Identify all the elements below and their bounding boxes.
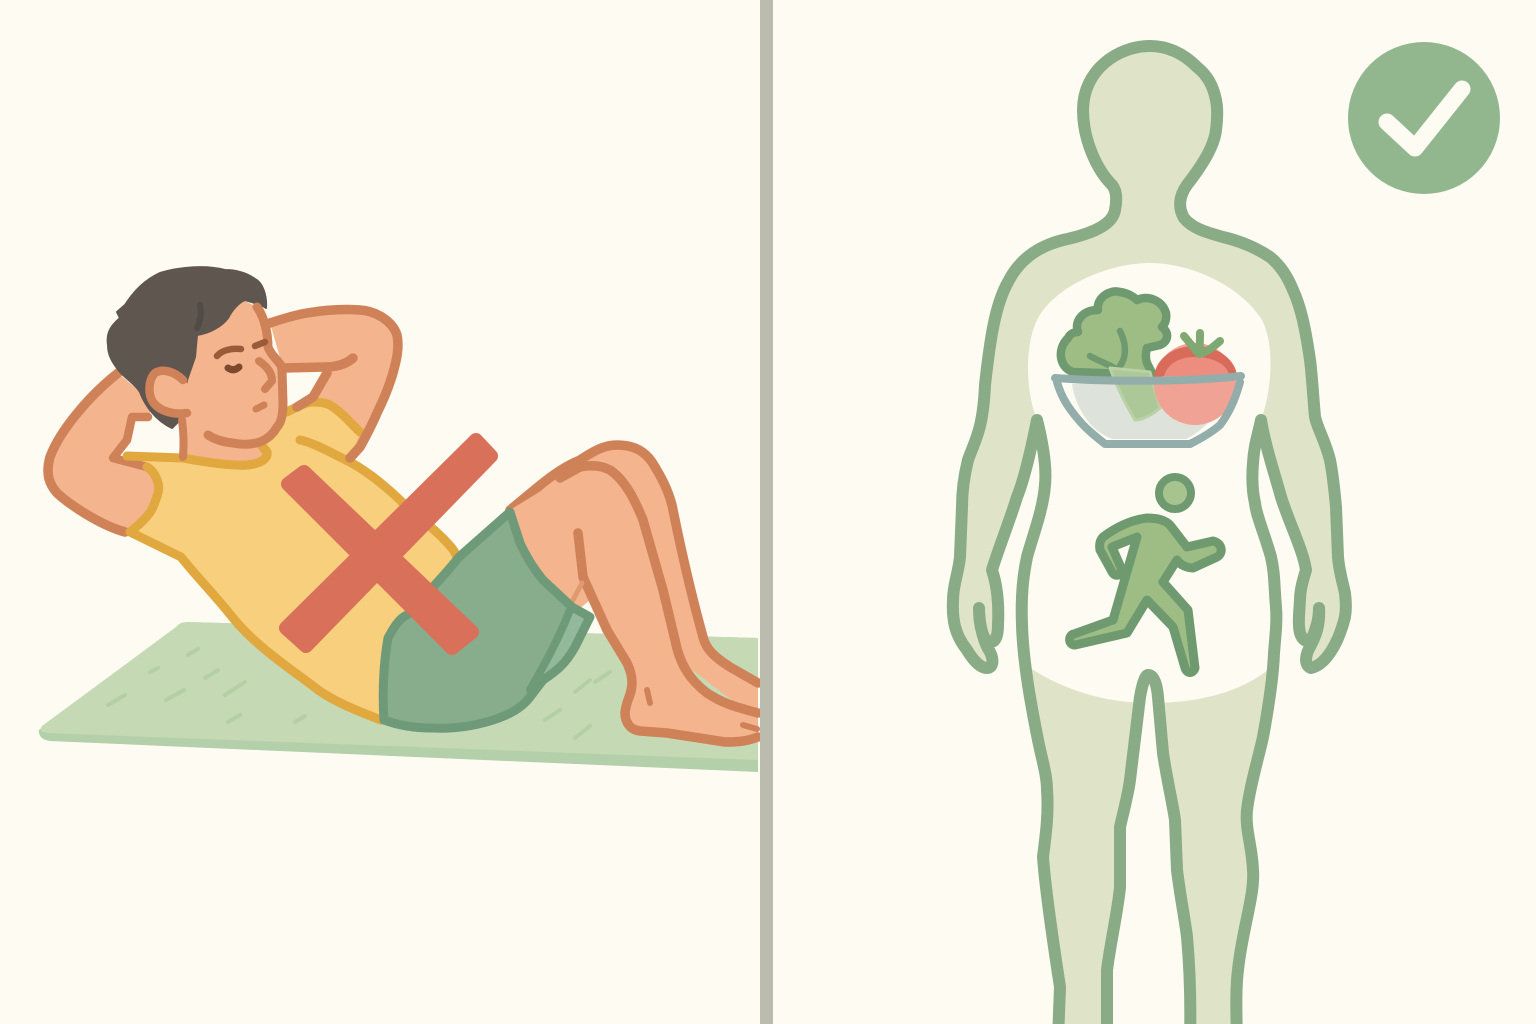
near leg and foot — [510, 466, 758, 742]
broccoli inner lines — [1090, 331, 1125, 374]
face outline — [208, 307, 283, 444]
bowl outline and rim — [1057, 382, 1240, 444]
neck line — [182, 420, 184, 457]
left arm raised behind head — [48, 373, 159, 532]
cream belly highlight — [1022, 263, 1276, 703]
panel divider — [760, 0, 773, 1024]
runner body — [1070, 518, 1221, 672]
icon: green check mark badge — [1348, 42, 1500, 194]
tomato — [1154, 333, 1237, 425]
icon: red X cross mark — [286, 440, 491, 648]
hair — [108, 267, 266, 428]
shirt seams — [127, 402, 459, 720]
eyebrows — [217, 342, 265, 356]
bowl glass interior — [1072, 380, 1235, 439]
right arm behind head — [270, 310, 398, 458]
collar line — [183, 446, 267, 465]
head and face — [108, 267, 283, 465]
shirt — [127, 402, 459, 720]
icon: salad bowl with broccoli and tomato — [1055, 291, 1241, 444]
nose — [259, 361, 272, 389]
mouth — [256, 405, 264, 409]
body silhouette — [953, 46, 1346, 1024]
ear — [149, 371, 197, 414]
closed eye — [228, 367, 239, 370]
broccoli stem — [1110, 368, 1160, 420]
right arm outline — [270, 310, 398, 458]
icon: running figure — [1070, 477, 1221, 672]
shorts — [383, 512, 590, 728]
panel: whole-body approach (correct) — [953, 42, 1500, 1024]
panel: sit-up exercise (incorrect) — [39, 267, 758, 772]
broccoli floret — [1061, 291, 1167, 375]
exercise mat — [39, 622, 758, 772]
body outline — [953, 46, 1346, 1024]
runner head — [1159, 477, 1191, 509]
far leg — [510, 445, 758, 720]
